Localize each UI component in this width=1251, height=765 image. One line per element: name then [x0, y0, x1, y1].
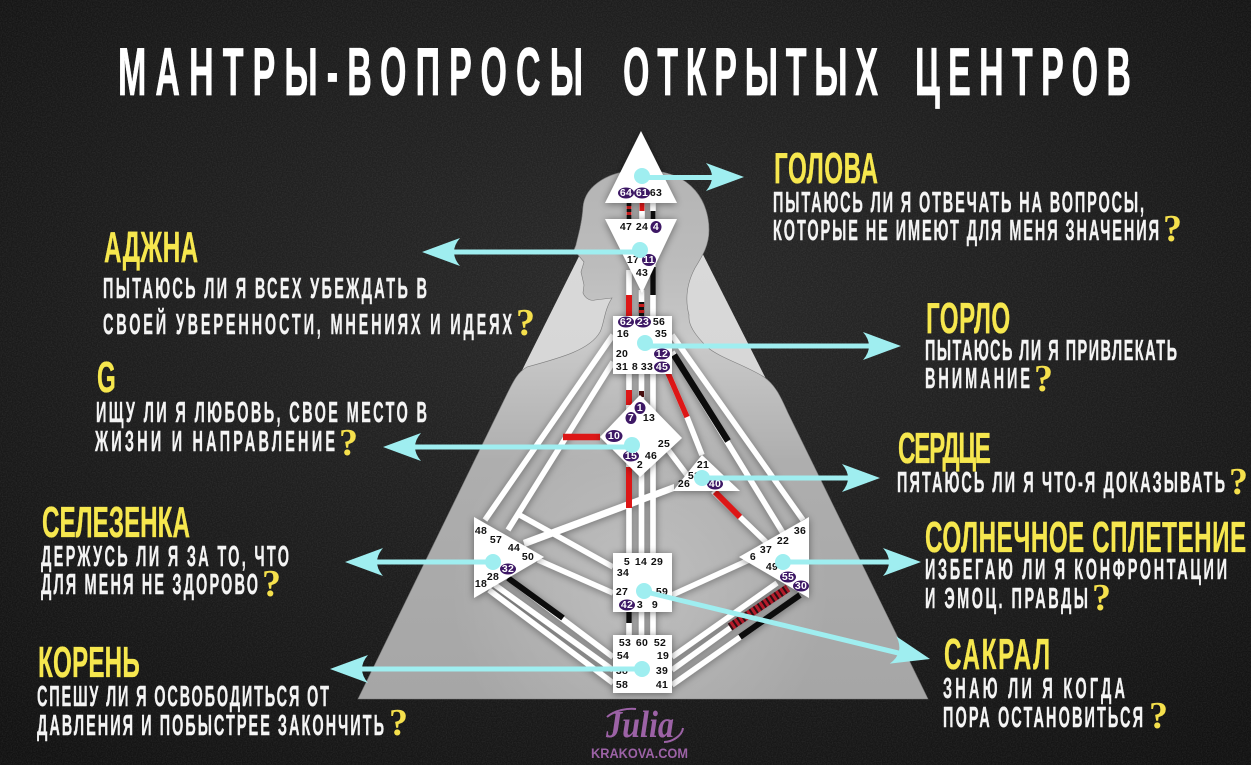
arrow: head	[634, 163, 744, 191]
bodygraph diagram	[358, 131, 928, 700]
label: аджна	[103, 222, 535, 344]
arrow: throat	[637, 332, 901, 360]
gate numbers: 28	[487, 571, 499, 583]
gate numbers: 51	[688, 470, 700, 482]
gate numbers: 35	[655, 328, 667, 340]
arrow: sacral	[636, 583, 933, 673]
gate numbers: 10	[608, 430, 620, 442]
gate numbers: 4	[653, 221, 659, 233]
gate numbers: 57	[490, 534, 502, 546]
gate numbers: 13	[643, 412, 655, 424]
gate numbers: 26	[678, 478, 690, 490]
channels	[485, 203, 803, 685]
gate numbers: 62	[620, 316, 632, 328]
label: G	[94, 352, 427, 464]
gate numbers: 59	[656, 586, 668, 598]
center: throat	[613, 316, 672, 374]
arrow: solar plexus	[775, 548, 921, 576]
gate numbers: 31	[616, 361, 628, 373]
gate numbers: 47	[620, 221, 632, 233]
label: горло: ?	[1034, 358, 1053, 400]
center: root	[613, 635, 672, 693]
logo: Julia Krakova	[591, 704, 688, 761]
gate numbers: 7	[628, 412, 634, 424]
title	[118, 34, 1131, 110]
label: сердце: ?	[1229, 461, 1248, 503]
label: корень: ДАВЛЕНИЯ И ПОБЫСТРЕЕ ЗАКОНЧИТЬ	[37, 708, 384, 741]
gate numbers: 15	[625, 450, 637, 462]
label: сакрал: ПОРА ОСТАНОВИТЬСЯ	[943, 700, 1143, 733]
gate numbers: 64	[620, 187, 632, 199]
gate numbers: 24	[636, 221, 648, 233]
label: селезенка	[41, 497, 289, 605]
gate numbers: 21	[697, 459, 709, 471]
gate numbers: 27	[616, 586, 628, 598]
gate numbers: 39	[656, 665, 668, 677]
gate numbers	[475, 187, 809, 691]
arrow: heart	[694, 464, 880, 492]
label: аджна: ?	[516, 302, 535, 344]
arrow: spleen	[345, 548, 501, 576]
label: сердце: СЕРДЦЕ	[898, 423, 991, 473]
label: горло	[925, 293, 1177, 400]
gate numbers: 53	[619, 637, 631, 649]
gate numbers: 49	[766, 561, 778, 573]
arrow: root	[330, 655, 650, 683]
gate numbers: 23	[637, 316, 649, 328]
gate numbers: 61	[636, 187, 648, 199]
gate numbers: 52	[654, 637, 666, 649]
gate numbers: 8	[632, 361, 638, 373]
gate numbers: 45	[656, 361, 668, 373]
gate numbers: 16	[617, 328, 629, 340]
gate numbers: 32	[502, 563, 514, 575]
large background triangle	[358, 132, 928, 699]
label: аджна: АДЖНА	[104, 222, 198, 272]
gate numbers: 9	[652, 599, 658, 611]
title: ЦЕНТРОВ	[915, 34, 1131, 110]
gate numbers: 46	[645, 450, 657, 462]
label: солнечное сплетение: И ЭМОЦ. ПРАВДЫ	[925, 581, 1088, 614]
arrow: G	[383, 433, 640, 461]
gate numbers: 3	[637, 599, 643, 611]
label: G: ИЩУ ЛИ Я ЛЮБОВЬ, СВОЕ МЕСТО В	[96, 395, 427, 428]
gate numbers: 6	[750, 551, 756, 563]
gate numbers: 19	[657, 650, 669, 662]
gate numbers: 60	[636, 637, 648, 649]
center: ajna	[605, 219, 677, 293]
gate numbers: 20	[616, 348, 628, 360]
title: ОТКРЫТЫХ	[623, 34, 878, 110]
gate numbers: 42	[621, 599, 633, 611]
label: G: ЖИЗНИ И НАПРАВЛЕНИЕ	[94, 424, 335, 457]
gate numbers: 55	[782, 571, 794, 583]
gate numbers: 2	[637, 459, 643, 471]
gate numbers: 56	[653, 316, 665, 328]
label: селезенка: ?	[262, 563, 281, 605]
gate numbers: 18	[475, 578, 487, 590]
label: голова	[773, 143, 1182, 250]
label: корень: СПЕШУ ЛИ Я ОСВОБОДИТЬСЯ ОТ	[37, 679, 329, 712]
gate numbers: 38	[616, 665, 628, 677]
gate numbers: 63	[650, 187, 662, 199]
gate numbers: 11	[643, 254, 655, 266]
center: head	[605, 131, 677, 203]
label: солнечное сплетение	[925, 512, 1246, 619]
gate numbers: 36	[794, 525, 806, 537]
gate numbers: 58	[616, 679, 628, 691]
logo: Julia Krakova: Julia	[605, 704, 674, 746]
label: корень	[37, 637, 408, 744]
label: корень: КОРЕНЬ	[38, 637, 140, 687]
gate numbers: 34	[617, 567, 629, 579]
label: голова: ПЫТАЮСЬ ЛИ Я ОТВЕЧАТЬ НА ВОПРОСЫ,	[773, 185, 1144, 218]
logo: Julia Krakova: KRAKOVA.COM	[591, 746, 688, 761]
title: МАНТРЫ-ВОПРОСЫ	[118, 34, 583, 110]
gate numbers: 43	[636, 267, 648, 279]
gate numbers: 44	[508, 542, 520, 554]
label: G: ?	[339, 422, 358, 464]
center: G	[600, 395, 682, 477]
label: солнечное сплетение: ?	[1092, 577, 1111, 619]
gate numbers: 5	[624, 556, 630, 568]
label: солнечное сплетение: СОЛНЕЧНОЕ СПЛЕТЕНИЕ	[925, 512, 1246, 562]
center: heart	[673, 455, 740, 491]
label: сакрал	[943, 629, 1168, 737]
label: селезенка: ДЕРЖУСЬ ЛИ Я ЗА ТО, ЧТО	[41, 539, 289, 572]
arrow: ajna	[422, 238, 648, 266]
label: голова: КОТОРЫЕ НЕ ИМЕЮТ ДЛЯ МЕНЯ ЗНАЧЕНИЯ	[773, 213, 1159, 246]
label: аджна: СВОЕЙ УВЕРЕННОСТИ, МНЕНИЯХ И ИДЕЯХ	[103, 307, 512, 340]
label: горло: ВНИМАНИЕ	[925, 361, 1030, 394]
silhouette: head, neck and torso	[358, 170, 928, 699]
label: голова: ГОЛОВА	[774, 143, 878, 193]
label: сердце	[897, 423, 1248, 503]
activated channel segments	[508, 203, 800, 637]
label: аджна: ПЫТАЮСЬ ЛИ Я ВСЕХ УБЕЖДАТЬ В	[103, 271, 427, 304]
label: сакрал: ЗНАЮ ЛИ Я КОГДА	[943, 671, 1125, 704]
label: G: G	[97, 352, 116, 402]
gate numbers: 12	[656, 348, 668, 360]
gate numbers: 1	[637, 402, 643, 414]
gate numbers: 54	[617, 650, 629, 662]
gate numbers: 25	[658, 438, 670, 450]
label: голова: ?	[1163, 208, 1182, 250]
label: сердце: ПЯТАЮСЬ ЛИ Я ЧТО-Я ДОКАЗЫВАТЬ	[897, 465, 1225, 498]
gate numbers: 17	[627, 254, 639, 266]
label: сакрал: ?	[1149, 695, 1168, 737]
label: корень: ?	[389, 702, 408, 744]
center: sacral	[613, 553, 672, 612]
gate numbers: 33	[641, 361, 653, 373]
gate numbers: 48	[475, 525, 487, 537]
label: сакрал: САКРАЛ	[944, 629, 1050, 679]
gate numbers: 14	[635, 556, 647, 568]
centers	[474, 131, 809, 693]
label: селезенка: СЕЛЕЗЕНКА	[42, 497, 190, 547]
pointer arrows	[330, 163, 933, 683]
inner light glow	[526, 480, 754, 699]
gate numbers: 37	[760, 544, 772, 556]
label: горло: ГОРЛО	[926, 293, 1010, 343]
gate numbers: 22	[777, 535, 789, 547]
center: spleen	[474, 517, 544, 598]
center: solar plexus	[739, 517, 809, 598]
gate numbers: 40	[709, 478, 721, 490]
gate numbers: 29	[651, 556, 663, 568]
label: селезенка: ДЛЯ МЕНЯ НЕ ЗДОРОВО	[41, 567, 258, 600]
gate numbers: 50	[522, 551, 534, 563]
label: горло: ПЫТАЮСЬ ЛИ Я ПРИВЛЕКАТЬ	[925, 333, 1177, 366]
gate numbers: 30	[795, 580, 807, 592]
gate numbers: 41	[656, 679, 668, 691]
label: солнечное сплетение: ИЗБЕГАЮ ЛИ Я КОНФРОНТАЦИИ	[925, 552, 1227, 585]
